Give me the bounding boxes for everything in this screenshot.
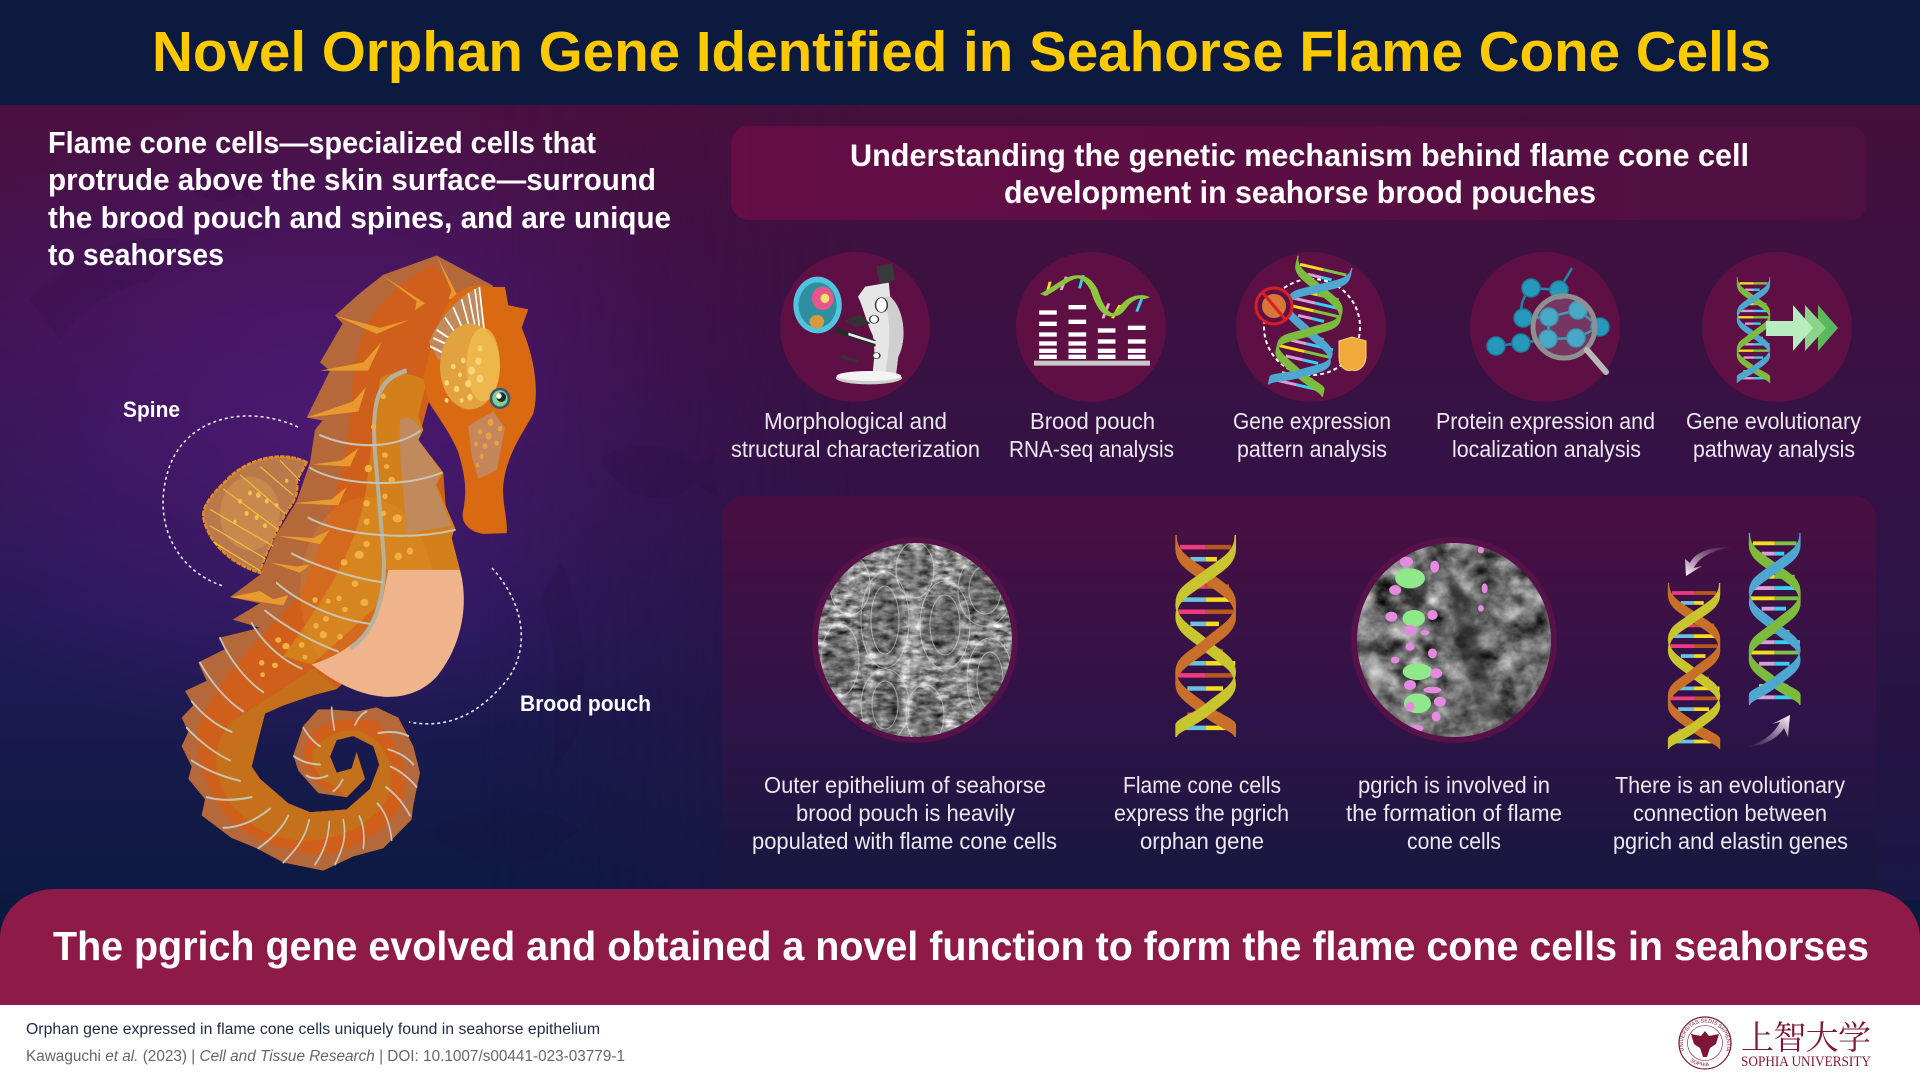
label: Morphological and [764,408,947,434]
finding 3: fluorescence micrograph [1346,537,1562,854]
dashed arc: brood pouch [409,568,521,724]
analysis item: gene expression: pattern analysis [1237,436,1387,462]
logo: Sophia University: SOPHIA UNIVERSITY [1741,1054,1871,1070]
panel: research question heading: development in seahorse brood pouches [1004,174,1596,210]
panel: findings [722,496,1876,854]
background [0,90,1920,900]
label: Protein expression and [1436,408,1655,434]
snout patch [468,411,505,479]
seahorse eye [490,388,510,409]
dashed arc: spine [163,416,298,586]
body dots [259,393,413,677]
finding 2: pgrich DNA: orphan gene [1140,828,1264,854]
label: Gene expression [1233,408,1391,434]
crest: SOPHIA [1690,1058,1710,1066]
seahorse illustration [182,256,536,871]
title: Novel Orphan Gene Identified in Seahorse Flame Cone Cells [152,20,1771,84]
ribs [187,431,455,865]
analysis item: protein expression: localization analysis [1452,436,1641,462]
analysis item: protein expression [1436,252,1655,462]
seahorse head [423,285,536,534]
finding 4: pgrich and elastin DNA: There is an evolutionary [1615,772,1845,798]
finding 2: pgrich DNA: express the pgrich [1114,800,1289,826]
finding 1: epithelium micrograph: brood pouch is heavily [796,800,1015,826]
analysis item: RNA-seq: RNA-seq analysis [1009,436,1174,462]
finding 2: pgrich DNA [1114,535,1289,854]
label: Gene evolutionary [1686,408,1861,434]
finding 1: epithelium micrograph: Outer epithelium of seahorse [764,772,1046,798]
analysis item: gene expression [1233,252,1391,462]
finding 3: fluorescence micrograph: the formation of flame [1346,800,1562,826]
icon: cell and microscope [793,263,903,384]
analysis item: RNA-seq [1009,252,1174,462]
title bar [0,0,1920,105]
analysis item: evolutionary pathway [1686,252,1861,462]
head crown fan [429,287,485,360]
crest: UNIVERSITAS SEDIS SAPIENTIAE [1680,1018,1730,1052]
intro text: to seahorses [48,237,224,272]
brood pouch [312,570,464,697]
finding 1: epithelium micrograph [752,537,1057,854]
finding 4: pgrich and elastin DNA [1613,533,1848,854]
label: Brood pouch: Brood pouch [520,691,651,716]
arrow: pgrich to elastin [1746,715,1790,747]
icon: protein chain and magnifier [1487,268,1609,372]
conclusion banner [0,889,1920,1005]
seahorse chest [283,373,460,665]
finding 4: pgrich and elastin DNA: connection between [1633,800,1827,826]
logo: Sophia University: 上智大学 [1741,1012,1871,1059]
intro text: protrude above the skin surface—surround [48,162,656,197]
backbone [350,371,407,648]
label: Spine: Spine [123,397,180,422]
icon: DNA, virus and shield [1256,256,1366,397]
icon: DNA with arrows [1737,277,1838,383]
arrow: elastin to pgrich [1685,547,1733,576]
finding 3: fluorescence micrograph: cone cells [1407,828,1501,854]
finding 1: epithelium micrograph: populated with flame cone cells [752,828,1057,854]
intro text [48,125,671,272]
citation [26,1021,625,1065]
finding 3: fluorescence micrograph: pgrich is involved in [1358,772,1550,798]
seahorse body outline [182,256,493,871]
seahorse orange interior [198,264,483,854]
label: Brood pouch [1030,408,1155,434]
head cheek [440,324,500,409]
intro text: Flame cone cells—specialized cells that [48,125,596,160]
panel: research question heading [731,126,1867,220]
neck strip [400,418,452,534]
panel: research question heading: Understanding the genetic mechanism behind flame cone cell [850,137,1749,173]
analysis item: morphological: structural characterization [731,436,980,462]
icon: RNA wave and gel bars [1034,275,1150,366]
analysis item: evolutionary pathway: pathway analysis [1693,436,1855,462]
finding 2: pgrich DNA: Flame cone cells [1123,772,1281,798]
citation: Orphan gene expressed in flame cone cells uniquely found in seahorse epithelium [26,1021,600,1038]
analysis item: morphological [731,252,980,462]
dorsal spine fin [203,457,307,573]
finding 4: pgrich and elastin DNA: pgrich and elastin genes [1613,828,1848,854]
citation: Kawaguchi et al. (2023) | Cell and Tissue Research | DOI: 10.1007/s00441-023-03779-1 [26,1048,625,1065]
seahorse golden tail band [216,669,392,841]
conclusion banner: The pgrich gene evolved and obtained a novel function to form the flame cone cells in seahorses [53,923,1869,969]
intro text: the brood pouch and spines, and are unique [48,200,671,235]
yellow back spikes [230,256,458,605]
